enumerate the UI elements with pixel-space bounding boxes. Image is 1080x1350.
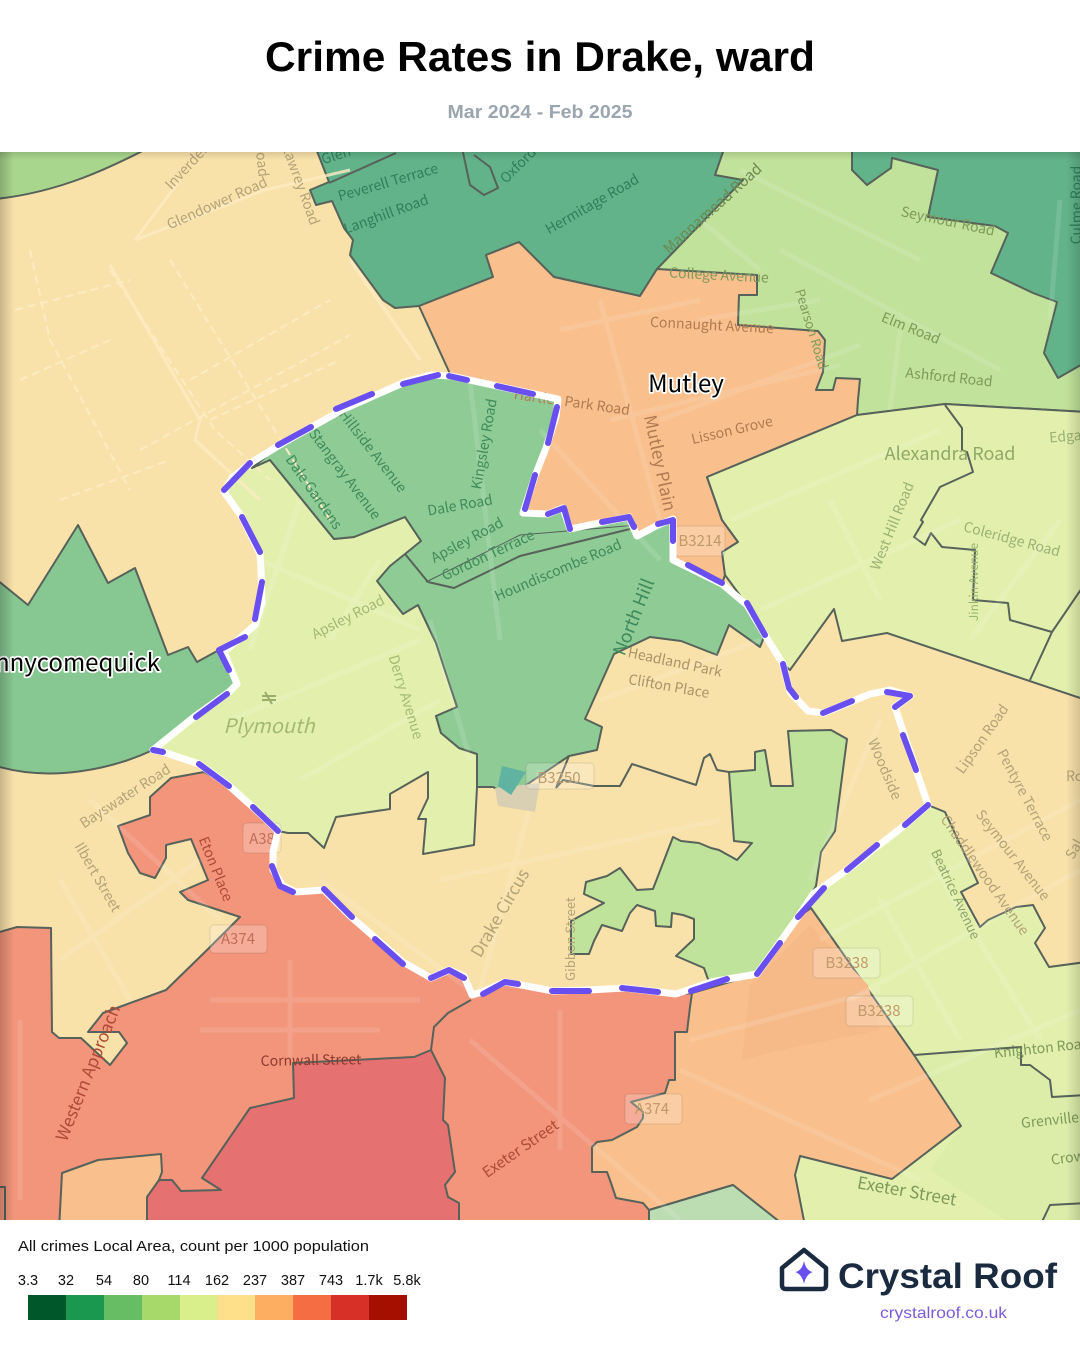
beige labels: [70, 132, 1080, 981]
beige labels: Seymour Avenue: [971, 805, 1055, 905]
beige labels: Road: [250, 142, 274, 178]
beige labels: Glendower Road: [164, 172, 270, 234]
road shield labels: B3238: [857, 1000, 901, 1021]
green labels: Gordon Terrace: [438, 525, 538, 585]
light green labels: West Hill Road: [865, 479, 919, 573]
boundary lines: [556, 754, 729, 788]
beige labels: Lawrey Road: [277, 142, 325, 228]
area: south-east pale lime: [795, 805, 1080, 1230]
light green labels: College Avenue: [669, 262, 770, 288]
green labels: Dale Gardens: [281, 451, 347, 534]
green labels: Langhill Road: [341, 189, 431, 239]
area: Mutley orange: [419, 242, 860, 584]
green labels: Kingsley Road: [466, 397, 502, 491]
legend tick values: 80: [133, 1273, 149, 1289]
area: south teal strip: [648, 1184, 779, 1220]
orange and red labels: Lisson Grove: [689, 411, 775, 449]
green labels: Houndiscombe Road: [491, 534, 625, 606]
light green labels: Jinkin Avenue: [965, 543, 982, 621]
beige labels: Woodside: [863, 735, 907, 803]
orange and red labels: Eton Place: [194, 834, 238, 905]
orange and red labels: Cornwall Street: [261, 1049, 362, 1071]
light green labels: Ashford Road: [904, 362, 994, 392]
road shield labels: A374: [635, 1098, 669, 1119]
light green labels: Mannamead Road: [658, 158, 766, 258]
beige labels: Lipson Road: [951, 700, 1013, 778]
icon: house with star: [782, 1250, 826, 1289]
legend tick values: 32: [58, 1273, 74, 1289]
green labels: Hermitage Road: [541, 169, 643, 239]
light green labels: Pearson Road: [791, 286, 834, 371]
orange and red labels: Western Approach: [48, 1001, 125, 1144]
area: city centre salmon: [0, 772, 700, 1230]
area: Alexandra pale lime: [707, 404, 1080, 700]
green labels: Peverell Terrace: [336, 158, 441, 206]
logo: Crystal Roof: [782, 1250, 1057, 1322]
light green labels: [223, 158, 1080, 1211]
light green labels: Seymour Road: [899, 201, 997, 241]
green labels: [281, 141, 1080, 659]
beige labels: Headland Park: [626, 642, 724, 682]
light green labels: Plymouth: [223, 710, 315, 739]
area: Knighton pale green: [914, 1047, 1080, 1230]
beige labels: Ilbert Street: [70, 838, 126, 916]
legend tick values: 3.3: [18, 1273, 38, 1289]
orange and red labels: Mutley Plain: [639, 412, 684, 513]
boundary: south-east lime edge: [928, 805, 1080, 967]
street network: [20, 170, 1080, 1220]
legend tick values: 1.7k: [355, 1273, 383, 1289]
light green labels: Elm Road: [879, 307, 943, 349]
road shield labels: B3238: [825, 952, 869, 973]
orange and red labels: Hartley Park Road: [513, 384, 631, 420]
icon: railway station: [262, 692, 276, 704]
beige solid streets: [110, 170, 420, 500]
legend tick values: 387: [281, 1273, 305, 1289]
area: North Hill green: [252, 375, 765, 796]
area: park darker orange: [852, 968, 871, 996]
area: Mannamead light green: [640, 146, 1080, 420]
light green labels: Alexandra Road: [885, 440, 1015, 466]
beige labels: Gibbon Street: [560, 897, 579, 981]
road shield labels: A38: [249, 828, 275, 849]
road shield labels: B3250: [537, 767, 581, 788]
road shields: [210, 526, 913, 1124]
area: Drake south light green: [571, 730, 847, 982]
green labels: Oxford: [495, 142, 541, 188]
orange and red labels: Connaught Avenue: [650, 312, 775, 338]
light green labels: Grenville: [1020, 1107, 1080, 1133]
road shield labels: [221, 530, 901, 1119]
legend tick values: 5.8k: [393, 1273, 421, 1289]
orange and red labels: Exeter Street: [478, 1114, 563, 1182]
green labels: Hillside Avenue: [334, 405, 412, 497]
legend tick values: 54: [96, 1273, 112, 1289]
road shield labels: B3214: [678, 530, 722, 551]
legend tick values: [18, 1273, 421, 1289]
legend colour swatches: [28, 1295, 407, 1320]
area: red hot spot: [147, 1050, 459, 1230]
legend tick values: 743: [319, 1273, 343, 1289]
road shield labels: A374: [221, 928, 255, 949]
green labels: Apsley Road: [427, 512, 507, 568]
legend: [18, 1238, 421, 1320]
title: Crime Rates in Drake, ward: [265, 33, 815, 80]
beige labels: Drake Circus: [463, 863, 534, 961]
legend tick values: 237: [243, 1273, 267, 1289]
ward boundary: purple dashes: [153, 375, 928, 994]
area: Exeter Street orange: [592, 908, 961, 1226]
boundary: Knighton edge: [914, 1047, 1080, 1097]
subtitle: date range: Mar 2024 - Feb 2025: [448, 102, 632, 122]
light green labels: Beatrice Avenue: [927, 846, 986, 942]
light green labels: Apsley Road: [308, 590, 388, 644]
area: Peverell dark green: [310, 146, 743, 308]
area: top-left light green: [0, 152, 142, 200]
marker: teal spot: [498, 766, 526, 795]
beige labels: Chaddlewood Avenue: [936, 811, 1034, 939]
light green labels: Derry Avenue: [384, 652, 428, 742]
legend tick values: 114: [167, 1273, 191, 1289]
beige labels: Clifton Place: [627, 669, 711, 703]
light green labels: Coleridge Road: [961, 516, 1063, 562]
green labels: Stangray Avenue: [304, 425, 386, 524]
beige labels: Bayswater Road: [76, 759, 174, 833]
green labels: Dale Road: [426, 489, 494, 521]
light green labels: Exeter Street: [856, 1169, 959, 1211]
area: lower-left orange: [58, 1153, 163, 1220]
logo wordmark: Crystal Roof: [838, 1257, 1057, 1296]
beige labels: Pentyre Terrace: [992, 745, 1058, 845]
orange and red labels: [48, 312, 775, 1182]
ward boundary: white casing: [153, 375, 928, 995]
legend title: All crimes Local Area, count per 1000 population: [18, 1238, 369, 1255]
legend tick values: 162: [205, 1273, 229, 1289]
beige labels: Inverdene: [160, 132, 220, 194]
map edge vignette: [0, 152, 1080, 1220]
place label: Mutley: Mutley: [648, 364, 724, 399]
green labels: North Hill: [606, 574, 660, 659]
logo url: crystalroof.co.uk: [880, 1305, 1008, 1322]
beige paths north-west: [15, 250, 350, 520]
area: Plymouth pale lime: [153, 460, 477, 854]
area: transport hub tint: [495, 783, 540, 812]
street labels: [0, 132, 1080, 1211]
green labels: Glen: [319, 141, 353, 169]
area: north-east dark green: [853, 152, 1080, 377]
area: Pennycomequick green: [0, 525, 237, 773]
